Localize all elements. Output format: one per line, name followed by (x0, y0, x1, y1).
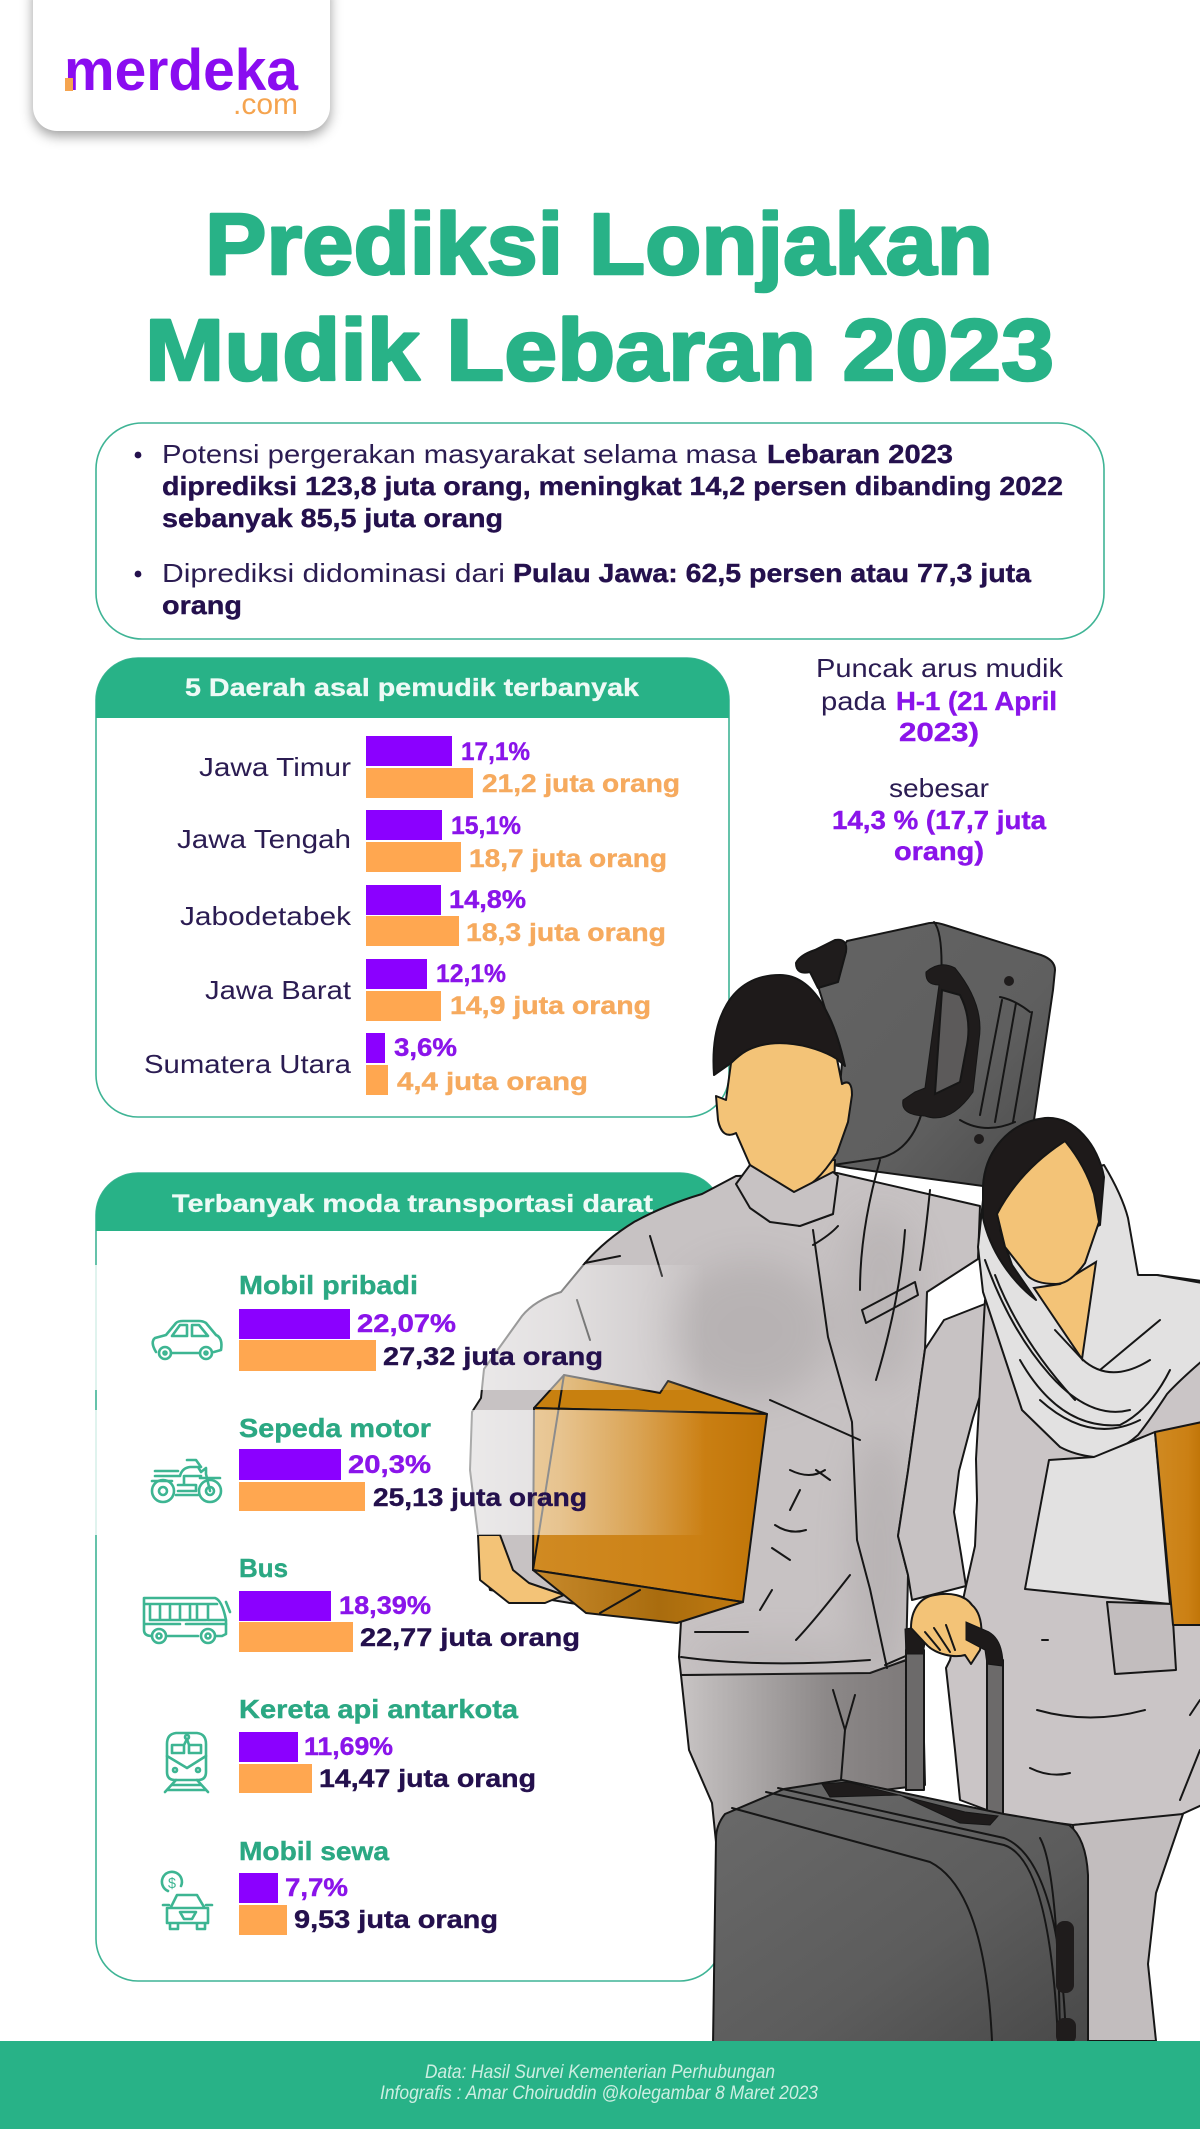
callout: puncak arus mudik: sebesar (889, 773, 989, 803)
row: Sumatera Utara: Sumatera Utara (144, 1049, 352, 1079)
callout: puncak arus mudik: pada (821, 686, 887, 716)
icon: train (165, 1733, 208, 1792)
panel: 5 daerah asal pemudik (96, 658, 729, 1117)
row: Jawa Timur: 21,2 juta orang (482, 770, 680, 798)
scarf lower flap (1025, 1432, 1176, 1674)
callout: puncak arus mudik: Puncak arus mudik (816, 653, 1064, 683)
footer: credits (380, 2062, 818, 2104)
callout: puncak arus mudik: 2023) (899, 717, 979, 747)
icon: bus (144, 1598, 230, 1643)
bullet: Lebaran 2023 forecast: diprediksi 123,8 juta orang, meningkat 14,2 persen dibanding 2022 (162, 471, 1063, 501)
row: Jawa Tengah: Jawa Tengah (177, 824, 351, 854)
row: Sepeda motor: Sepeda motor (239, 1413, 431, 1443)
bullet: Lebaran 2023 forecast: sebanyak 85,5 juta orang (162, 503, 503, 533)
woman's face and hair (983, 1118, 1104, 1300)
row: Mobil pribadi: 27,32 juta orang (383, 1343, 603, 1371)
bullet: Pulau Jawa: Pulau Jawa: 62,5 persen atau 77,3 juta (513, 558, 1032, 588)
chart: moda transportasi darat (144, 1270, 603, 1935)
footer: credits: Infografis : Amar Choiruddin @kolegambar 8 Maret 2023 (380, 2083, 818, 2104)
row: Kereta api antarkota (165, 1694, 536, 1793)
row: Jawa Barat: Jawa Barat (205, 975, 352, 1005)
luggage handle: left grip (905, 1628, 925, 1654)
footer (0, 2041, 1200, 2129)
panel: moda transportasi frame (96, 1173, 722, 1981)
callout: puncak arus mudik: H-1 (21 April (896, 686, 1057, 716)
bullet: Lebaran 2023 forecast (135, 439, 1063, 533)
row: Mobil sewa (162, 1836, 498, 1935)
panel header: Terbanyak moda transportasi darat (172, 1190, 654, 1218)
icon: car (153, 1321, 221, 1359)
row: Bus (144, 1553, 580, 1652)
row: Kereta api antarkota: Kereta api antarkota (239, 1694, 519, 1724)
woman's sleeve (898, 1302, 990, 1600)
translucent row band: upper (92, 1265, 705, 1390)
row: Mobil sewa: 9,53 juta orang (294, 1906, 498, 1934)
bullet: Pulau Jawa (135, 558, 1032, 620)
title: Mudik Lebaran 2023 (145, 302, 1054, 399)
panel header: 5 Daerah asal pemudik terbanyak (185, 674, 639, 702)
callout: puncak arus mudik: orang) (894, 836, 984, 866)
row: Sumatera Utara: 4,4 juta orang (397, 1068, 588, 1096)
logo wordmark: .com: .com (233, 88, 298, 121)
row: Jawa Timur: 17,1% (461, 738, 530, 766)
callout: puncak arus mudik (816, 653, 1064, 866)
man's jacket (470, 1160, 980, 1780)
row: Jawa Barat: 14,9 juta orang (450, 992, 651, 1020)
man's head (714, 975, 852, 1226)
woman's scarf (978, 1165, 1200, 1457)
row: Jawa Barat: 12,1% (436, 960, 506, 988)
row: Sepeda motor: 20,3% (348, 1451, 431, 1479)
woman's robe (946, 1275, 1200, 1825)
illustration: couple going home with luggage (470, 922, 1200, 2045)
row: Jawa Tengah: 15,1% (451, 812, 521, 840)
back suitcase on shoulder (796, 922, 1055, 1186)
man's hand under the box (478, 1535, 564, 1603)
row: Mobil sewa: 7,7% (285, 1874, 348, 1902)
logo card (33, 0, 330, 131)
icon: rental car (162, 1872, 212, 1929)
row: Jabodetabek: 14,8% (449, 886, 526, 914)
row: Bus: Bus (239, 1553, 288, 1583)
carton box held by woman (1155, 1422, 1200, 1625)
footer: credits: Data: Hasil Survei Kementerian Perhubungan (425, 2062, 775, 2083)
man's pants (681, 1655, 925, 1842)
bullet: Pulau Jawa: Diprediksi didominasi dari (162, 558, 505, 588)
panel header (96, 658, 729, 718)
carton box held by man (533, 1375, 767, 1623)
callout: puncak arus mudik: 14,3 % (17,7 juta (832, 805, 1047, 835)
front suitcase (713, 1650, 1088, 2045)
icon: motorcycle (152, 1460, 221, 1502)
row: Jabodetabek: 18,3 juta orang (466, 919, 666, 947)
row: Bus: 22,77 juta orang (360, 1624, 580, 1652)
row: Mobil pribadi: Mobil pribadi (239, 1270, 418, 1300)
logo wordmark: merdeka: merdeka (64, 38, 299, 103)
panel: summary (96, 423, 1104, 639)
row: Jawa Barat (205, 959, 651, 1021)
row: Jawa Timur (199, 736, 680, 798)
icon: rental car: $ (168, 1875, 177, 1892)
row: Mobil pribadi: 22,07% (357, 1310, 456, 1338)
bullet: Pulau Jawa: orang (162, 590, 242, 620)
woman's hand (911, 1594, 982, 1664)
row: Jabodetabek (180, 885, 666, 947)
row: Jawa Timur: Jawa Timur (199, 752, 351, 782)
row: Sumatera Utara (144, 1033, 588, 1096)
row: Sepeda motor: 25,13 juta orang (373, 1484, 587, 1512)
row: Jawa Tengah (177, 810, 667, 873)
row: Mobil sewa: Mobil sewa (239, 1836, 390, 1866)
row: Sumatera Utara: 3,6% (394, 1034, 457, 1062)
row: Kereta api antarkota: 14,47 juta orang (319, 1765, 536, 1793)
luggage handle: right grip (966, 1622, 1003, 1666)
row: Kereta api antarkota: 11,69% (304, 1733, 393, 1761)
row: Jabodetabek: Jabodetabek (180, 901, 352, 931)
title (145, 196, 1054, 399)
row: Mobil pribadi (153, 1270, 603, 1371)
panel header (96, 1173, 722, 1231)
translucent row band: lower (92, 1410, 705, 1535)
title: Prediksi Lonjakan (205, 196, 993, 293)
bullet: Lebaran 2023 forecast: Lebaran 2023 (767, 439, 953, 469)
row: Sepeda motor (152, 1413, 587, 1512)
row: Jawa Tengah: 18,7 juta orang (469, 845, 667, 873)
woman's pants (1073, 1814, 1183, 2041)
row: Bus: 18,39% (339, 1592, 431, 1620)
bullet: Lebaran 2023 forecast: Potensi pergerakan masyarakat selama masa (162, 439, 758, 469)
